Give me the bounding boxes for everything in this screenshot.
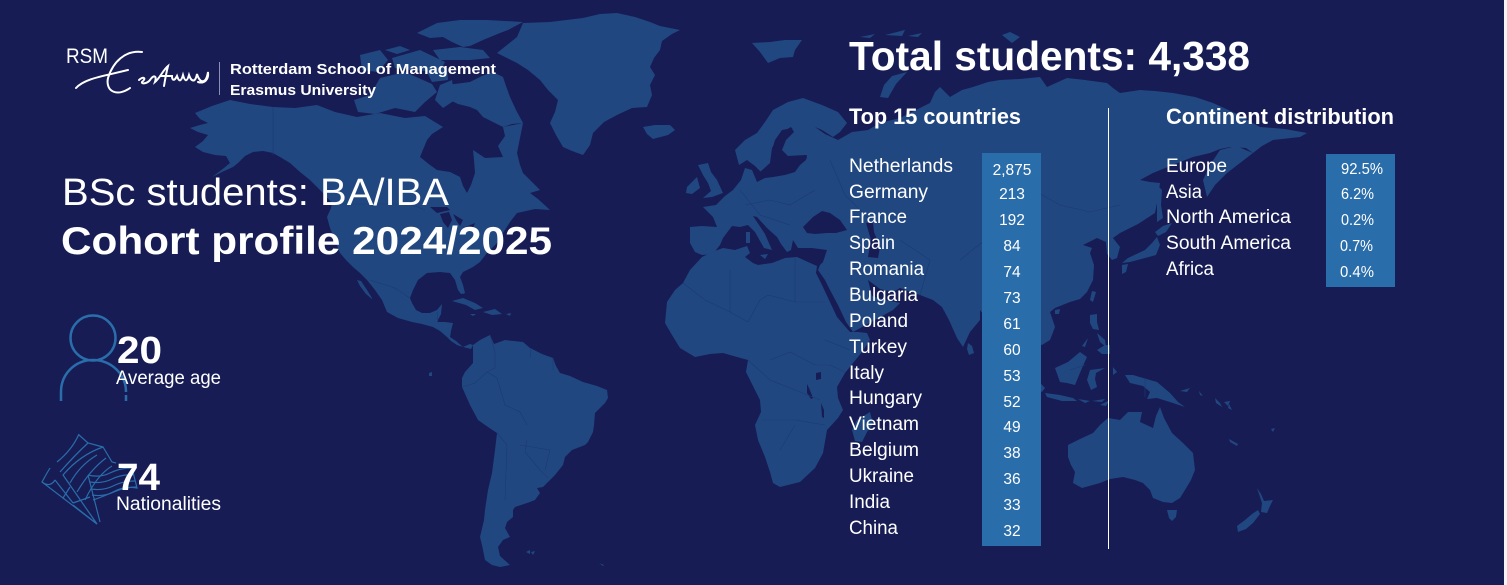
stat: average age	[116, 330, 221, 389]
stat: nationalities: Nationalities	[116, 494, 221, 515]
logo wordmark RSM: RSM	[66, 45, 108, 68]
Australia	[1068, 407, 1195, 503]
Honshu	[1122, 237, 1160, 263]
Sicily	[760, 254, 768, 259]
Novaya Zemlya	[880, 72, 907, 98]
value column background	[982, 153, 1041, 546]
country values: 49	[1003, 419, 1021, 436]
country names: Netherlands	[849, 156, 953, 177]
continent names: Africa	[1166, 259, 1214, 280]
continent values: 0.2%	[1341, 212, 1374, 229]
continent values: 6.2%	[1341, 186, 1374, 203]
country values: 33	[1003, 497, 1021, 514]
country names: Turkey	[849, 337, 907, 358]
Florida Keys and Bahamas	[458, 282, 465, 294]
continent names: South America	[1166, 233, 1291, 254]
Hainan	[1055, 309, 1060, 314]
logo divider	[219, 62, 220, 95]
value column background	[1326, 154, 1395, 287]
Java and Lesser Sunda Islands	[1045, 393, 1077, 401]
Arctic Russian islands	[860, 34, 875, 38]
country names: France	[849, 207, 907, 228]
continent names: Asia	[1166, 182, 1202, 203]
icon: person	[61, 316, 126, 401]
country names: Belgium	[849, 440, 919, 461]
country names: India	[849, 492, 890, 513]
Sumatra	[1000, 345, 1045, 392]
continent values: 92.5%	[1341, 161, 1383, 178]
New Zealand South Island	[1237, 510, 1260, 532]
Victoria Island	[354, 72, 437, 114]
Sardinia and Corsica	[746, 232, 750, 243]
country names	[849, 156, 953, 539]
country values: 52	[1003, 394, 1021, 411]
vertical divider	[1108, 108, 1109, 549]
country values: 60	[1003, 342, 1021, 359]
country values: 74	[1003, 264, 1021, 281]
stat: average age: 20	[117, 330, 162, 372]
heading: top 15 countries: Top 15 countries	[849, 104, 1021, 129]
country values: 36	[1003, 471, 1021, 488]
heading: total students: Total students: 4,338	[849, 33, 1250, 79]
Galapagos	[429, 372, 432, 376]
Baltic Sea	[760, 127, 807, 178]
South Georgia	[599, 563, 604, 566]
Falkland Islands	[526, 550, 530, 554]
Svalbard	[752, 40, 802, 63]
Sulawesi	[1087, 368, 1105, 390]
country names: Germany	[849, 182, 928, 203]
country values: 192	[999, 212, 1025, 229]
South America	[462, 335, 608, 567]
North and Central America	[190, 100, 550, 349]
country names: Bulgaria	[849, 285, 918, 306]
Banks and Melville Islands	[360, 50, 388, 72]
Iceland	[643, 125, 675, 139]
country names: Ukraine	[849, 466, 914, 487]
continent values: 0.7%	[1340, 238, 1373, 255]
logo signature Erasmus	[76, 52, 208, 93]
icon: flags	[42, 434, 137, 524]
Solomon Islands and Vanuatu	[1199, 391, 1203, 396]
Great Britain	[698, 163, 723, 198]
stat: nationalities: 74	[117, 457, 160, 499]
country names: Romania	[849, 259, 924, 280]
continent names	[1166, 156, 1291, 280]
Caspian Sea	[866, 222, 880, 258]
country names: Vietnam	[849, 414, 919, 435]
Eurasia	[690, 77, 1307, 380]
panel: top 15 countries	[849, 104, 1041, 546]
country values: 61	[1003, 316, 1021, 333]
logo: Erasmus University	[230, 82, 377, 99]
Tasmania	[1167, 510, 1177, 521]
Taiwan	[1090, 291, 1096, 302]
continent names: North America	[1166, 207, 1291, 228]
Africa	[665, 246, 870, 487]
Boothia Peninsula	[435, 80, 455, 108]
New Zealand North Island	[1257, 488, 1273, 513]
continent values: 0.4%	[1340, 264, 1374, 281]
Kyushu and Shikoku	[1122, 264, 1128, 274]
logo institution name: Rotterdam School of Management	[230, 61, 496, 78]
Sri Lanka	[967, 343, 974, 355]
country names: Italy	[849, 363, 884, 384]
country values: 84	[1003, 238, 1021, 255]
country values	[993, 162, 1031, 540]
Baja California	[357, 280, 372, 299]
stat: nationalities	[116, 457, 221, 515]
Lake Victoria and Lake Tanganyika	[816, 372, 821, 380]
country values: 213	[999, 186, 1025, 203]
heading: continent distribution: Continent distribution	[1166, 104, 1394, 129]
country values: 32	[1003, 523, 1021, 540]
title: BSc students: BA/IBA	[62, 172, 450, 214]
Greenland	[497, 13, 680, 155]
country values: 2,875	[993, 162, 1031, 179]
Caribbean islands	[452, 298, 483, 310]
stat: average age: Average age	[116, 368, 221, 389]
Hokkaido	[1155, 223, 1172, 236]
logo	[66, 45, 496, 99]
Philippines	[1090, 314, 1099, 330]
country names: Poland	[849, 311, 908, 332]
Devon Island	[433, 47, 490, 60]
country values: 73	[1003, 290, 1021, 307]
Ireland	[686, 177, 700, 194]
world map background	[190, 13, 1307, 567]
Moluccas	[1113, 367, 1117, 375]
Great Lakes	[430, 207, 450, 213]
Black Sea	[803, 211, 847, 234]
country values: 53	[1003, 368, 1021, 385]
New Guinea	[1125, 375, 1185, 407]
Kamchatka	[1203, 146, 1253, 197]
Sakhalin	[1157, 185, 1163, 222]
Hudson Bay lake	[474, 115, 481, 120]
country names: Hungary	[849, 388, 922, 409]
country names: China	[849, 518, 898, 539]
country values: 38	[1003, 445, 1021, 462]
continent names: Europe	[1166, 156, 1227, 177]
country names: Spain	[849, 233, 895, 254]
New Caledonia and Fiji	[1229, 439, 1238, 446]
title	[61, 172, 552, 263]
Baffin Island	[447, 72, 523, 127]
Borneo	[1055, 352, 1087, 385]
Ellesmere Island	[417, 20, 523, 47]
continent values	[1340, 161, 1383, 281]
panel: continent distribution	[1166, 104, 1395, 287]
country borders	[273, 107, 1145, 500]
title: Cohort profile 2024/2025	[61, 220, 552, 263]
Madagascar	[852, 412, 873, 442]
